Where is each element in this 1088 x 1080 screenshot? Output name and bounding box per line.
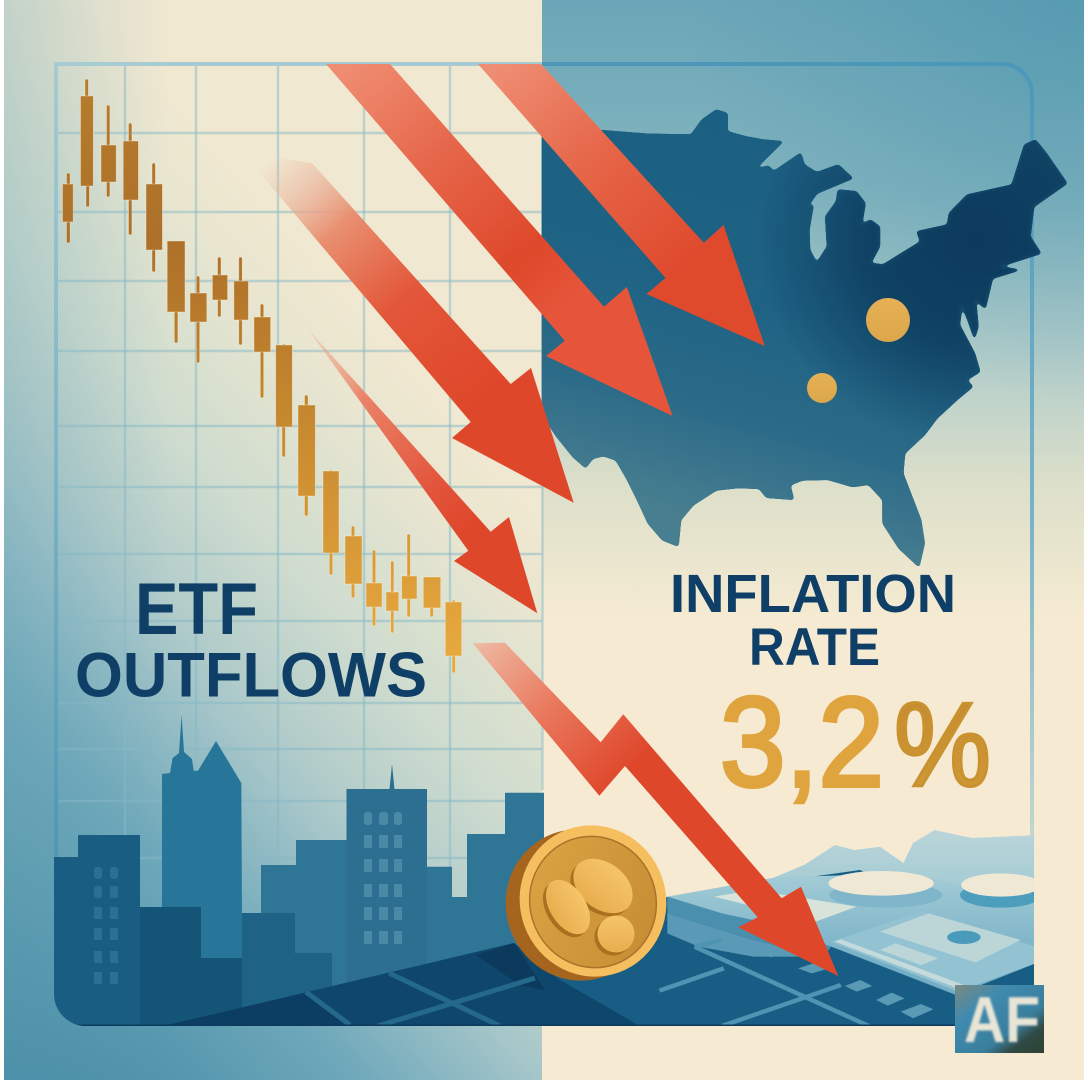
inflation value: 3,2%: 3,2	[720, 671, 884, 813]
arrow: long upper, pointing into map	[326, 64, 673, 416]
city skyline	[54, 715, 544, 1026]
map marker: large gold dot	[866, 298, 910, 342]
tower with spire	[162, 715, 242, 958]
heading: inflation rate	[670, 564, 956, 677]
panel frame	[56, 64, 1032, 880]
heading: inflation rate: INFLATION	[670, 564, 956, 624]
street ground	[76, 943, 955, 1026]
candlestick chart	[62, 79, 462, 673]
dark block	[140, 907, 242, 1026]
left building	[54, 835, 140, 1026]
heading: ETF outflows: ETF	[135, 569, 258, 650]
map marker: small gold dot	[807, 373, 837, 403]
arrow: zigzag downward	[473, 643, 838, 976]
map of the United States	[543, 110, 1067, 567]
inflation value: 3,2%	[720, 671, 991, 813]
chart grid	[57, 66, 542, 880]
mid-rise block	[261, 765, 544, 1000]
low block	[242, 913, 332, 1008]
badge: AF logo: AF	[964, 983, 1040, 1056]
heading: inflation rate: RATE	[749, 618, 880, 677]
heading: ETF outflows	[75, 569, 427, 710]
tower windows	[364, 812, 402, 944]
left building windows	[94, 867, 118, 984]
bottom right landscape and dashboard	[554, 830, 1034, 1024]
gold coin	[484, 805, 688, 1001]
arrow: top right, pointing into map	[478, 64, 765, 346]
heading: ETF outflows: OUTFLOWS	[75, 640, 427, 710]
arrow: thin lower	[307, 328, 537, 613]
inflation value: 3,2%: %	[894, 678, 991, 812]
arrow: fading middle	[243, 153, 574, 503]
